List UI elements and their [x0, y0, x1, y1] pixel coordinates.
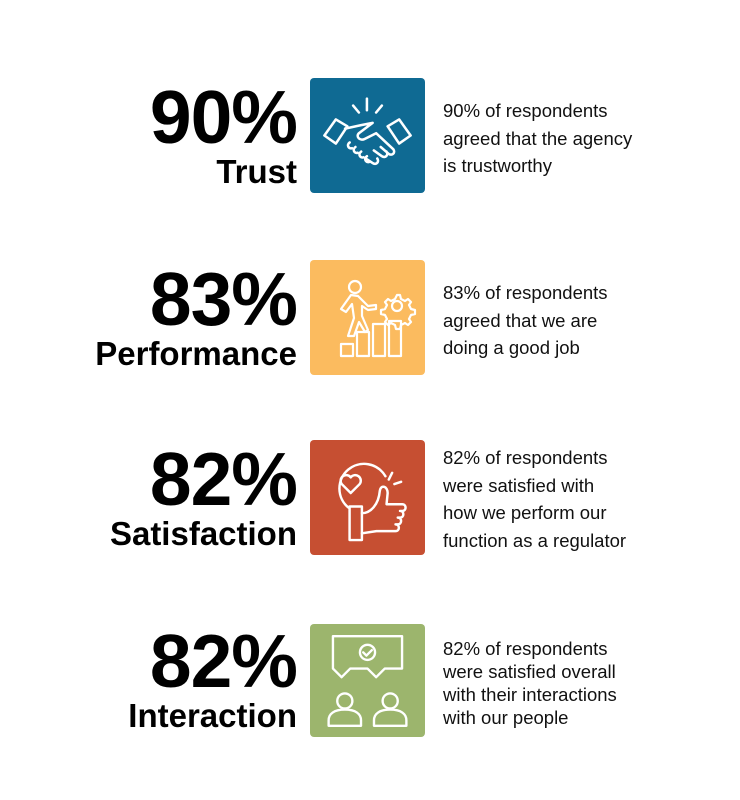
label: Trust: Trust: [216, 153, 297, 190]
description: 83% of respondents: [443, 282, 608, 303]
description: with our people: [443, 707, 568, 728]
number: 83%: 83%: [150, 257, 297, 341]
number: 82%: 82%: [150, 437, 297, 521]
description: function as a regulator: [443, 530, 626, 550]
description: 90% of respondents: [443, 100, 608, 121]
description: [443, 447, 626, 551]
row: trust: [150, 75, 632, 193]
description: 82% of respondents: [443, 638, 608, 659]
description: [443, 100, 632, 176]
row: satisfaction: [110, 437, 626, 555]
number: 82%: 82%: [150, 619, 297, 703]
description: how we perform our: [443, 502, 606, 523]
label: Interaction: Interaction: [128, 697, 297, 734]
description: agreed that the agency: [443, 128, 632, 148]
description: 82% of respondents: [443, 447, 608, 468]
row: interaction: [128, 619, 617, 737]
icon box: handshake: [310, 78, 425, 193]
description: [443, 638, 617, 728]
description: with their interactions: [443, 684, 617, 705]
description: agreed that we are: [443, 310, 597, 330]
description: is trustworthy: [443, 155, 552, 176]
description: were satisfied overall: [443, 661, 616, 682]
icon box: climbing steps: [310, 260, 425, 375]
row: performance: [95, 257, 608, 375]
label: Satisfaction: Satisfaction: [110, 515, 297, 552]
label: Performance: Performance: [95, 335, 297, 372]
number: 90%: 90%: [150, 75, 297, 159]
description: were satisfied with: [443, 474, 594, 496]
icon box: heart thumbs up: [310, 440, 425, 555]
description: [443, 282, 608, 358]
description: doing a good job: [443, 337, 580, 358]
icon box: conversation: [310, 624, 425, 737]
